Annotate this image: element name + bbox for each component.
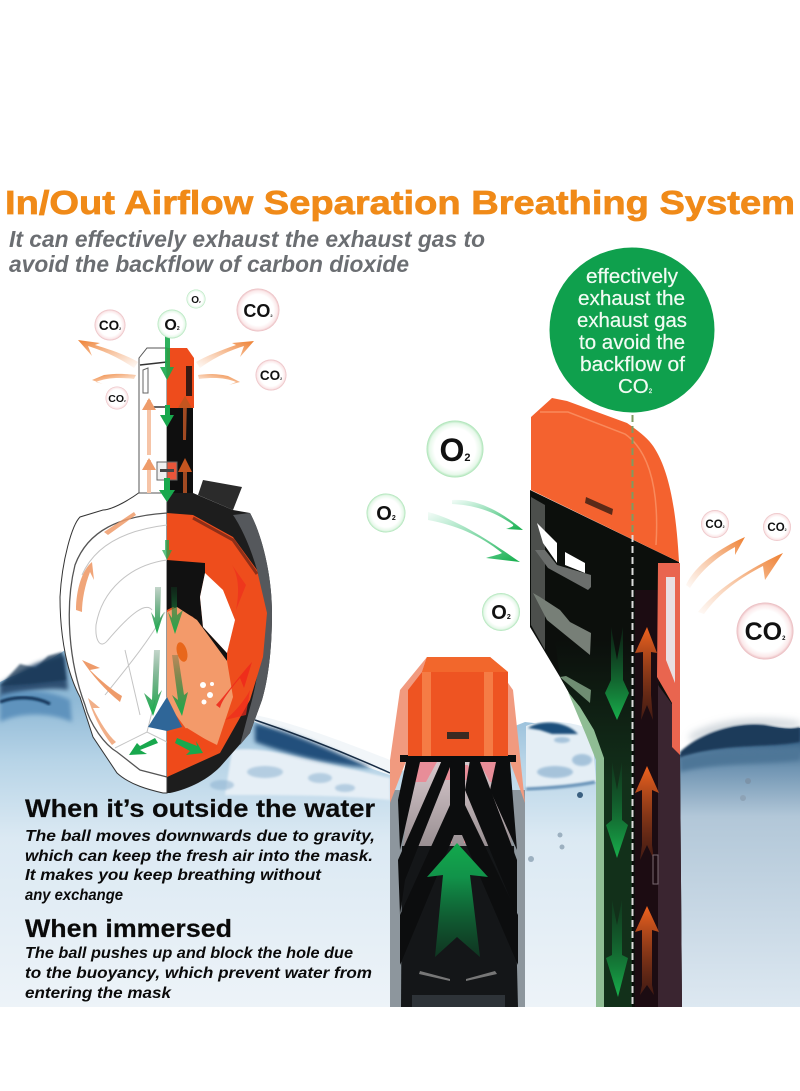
circle: O2 center: [158, 310, 186, 338]
water background: [0, 650, 800, 1007]
circle: O2 small: [186, 290, 206, 308]
circle: CO2 left: CO2: [99, 318, 121, 333]
circle: O2 center: O2: [164, 317, 180, 334]
green callout: [550, 248, 714, 412]
green inflow arrows: [428, 500, 523, 562]
mask visor dark rib: [193, 518, 257, 574]
black diagonal bars: [398, 755, 518, 965]
circle: CO2 small 2: CO2: [767, 522, 787, 534]
tube right window: [186, 366, 192, 396]
subtitle: avoid the backflow of carbon dioxide: [9, 251, 409, 277]
circle: CO2 large right: [736, 602, 794, 660]
tube body: [530, 490, 682, 1007]
circle: O2 small: O2: [191, 295, 201, 306]
circle: CO2 small 2: [763, 513, 791, 541]
mask right orange visor: [167, 513, 267, 777]
tube orange cap: [531, 398, 679, 562]
text: when immersed: [25, 915, 372, 1002]
front highlight: [422, 672, 431, 756]
text: outside the water: The ball moves downwards due to gravity,: [25, 828, 375, 845]
circle: O2 lower: O2: [491, 602, 511, 624]
inner light panel: [403, 758, 512, 850]
side strip orange: [657, 563, 680, 755]
mask left outline: [60, 492, 167, 793]
mask right black frame: [167, 560, 227, 661]
tube lower dark brown: [635, 590, 659, 1007]
circle: O2 left: O2: [376, 503, 396, 525]
text: outside the water: any exchange: [25, 887, 123, 904]
green arrow up: [427, 843, 488, 957]
cap slot: [585, 497, 613, 515]
snorkel valve: [157, 462, 177, 480]
gas circles around big tube: [366, 420, 794, 660]
title: In/Out Airflow Separation Breathing System: [5, 184, 795, 221]
mask right lens opening: [200, 573, 235, 653]
snorkel top right orange: [167, 348, 194, 408]
mask illustration: [60, 335, 272, 793]
text: when immersed: to the buoyancy, which prevent water from: [25, 965, 372, 982]
text: when immersed: When immersed: [25, 915, 232, 943]
green callout: to avoid the: [579, 331, 685, 354]
mask left inner rim: [69, 513, 167, 777]
small snorkel tube front view: [390, 657, 525, 1007]
front highlight right: [484, 672, 493, 756]
orange outflow arrows: [686, 537, 783, 614]
vent bottom frame: [419, 971, 497, 981]
green callout: CO2: [618, 375, 653, 398]
pale orange sides: [390, 657, 525, 803]
side clip line: [653, 855, 658, 884]
slot: [447, 732, 469, 739]
mask right shell: [167, 493, 272, 793]
gas circles around mask: [94, 288, 286, 410]
subtitle: [9, 226, 485, 277]
mask right face panel: [167, 607, 233, 745]
circle: O2 lower: [482, 593, 520, 631]
subtitle: It can effectively exhaust the exhaust gas to: [9, 226, 485, 252]
green callout: effectively: [586, 265, 679, 288]
dashed line over cap: [632, 415, 634, 535]
strip window: [666, 577, 675, 683]
orange front: [408, 657, 508, 756]
text: outside the water: which can keep the fresh air into the mask.: [25, 848, 373, 865]
circle: O2 large: [426, 420, 484, 478]
exhaust arrows: [78, 340, 254, 385]
green callout: backflow of: [580, 353, 685, 376]
circle: CO2 left: [94, 310, 126, 340]
mask vent dots: [200, 682, 214, 704]
circle: CO2 right: CO2: [260, 368, 282, 383]
circle: CO2 lower left: [106, 386, 128, 410]
text: outside the water: It makes you keep breathing without: [25, 867, 322, 884]
airflow arrows down: [605, 627, 629, 997]
text: when immersed: entering the mask: [25, 985, 173, 1002]
circle: CO2 small 1: [701, 510, 729, 538]
lower dark interior: [401, 846, 518, 1007]
body grey: [390, 790, 525, 1007]
bottom band: [412, 995, 505, 1007]
airflow arrows in mask: [76, 335, 252, 755]
vent slats: [533, 523, 591, 703]
center dashed line: [632, 535, 634, 1007]
circle: CO2 large right: CO2: [745, 618, 786, 646]
tube lower dark green: [555, 640, 632, 1007]
green callout: exhaust gas: [577, 309, 687, 332]
circle: CO2 large: CO2: [243, 301, 273, 321]
text: outside the water: When it’s outside the water: [25, 795, 375, 823]
snorkel tube left: [139, 348, 167, 493]
mask bottom water gap: [148, 697, 182, 731]
big snorkel tube: [530, 398, 682, 1007]
tube left band: [140, 362, 167, 407]
text: outside the water: [25, 795, 375, 904]
cap highlight: [540, 412, 657, 545]
pink top panels: [412, 760, 505, 843]
circle: CO2 large: [236, 288, 280, 332]
circle: CO2 lower left: CO2: [108, 393, 126, 405]
mask chin orange: [167, 728, 218, 777]
cap top: [422, 657, 508, 672]
mask nose mark: [175, 641, 189, 663]
circle: O2 large: O2: [439, 432, 471, 468]
tube edge light green: [568, 692, 604, 1007]
circle: CO2 right: [256, 360, 286, 390]
tube left window: [143, 368, 148, 393]
circle: CO2 small 1: CO2: [705, 519, 725, 531]
green callout: exhaust the: [578, 287, 685, 310]
text: when immersed: The ball pushes up and block the hole due: [25, 945, 353, 962]
mask left face lines: [82, 525, 167, 748]
airflow arrows up: [635, 627, 659, 995]
mask right outer grey: [233, 513, 272, 745]
circle: O2 left: [366, 494, 406, 532]
tube left grey strip: [531, 497, 545, 650]
snorkel tube right black: [167, 405, 193, 493]
tube right plum panel: [658, 685, 682, 1007]
strap: [198, 480, 242, 510]
